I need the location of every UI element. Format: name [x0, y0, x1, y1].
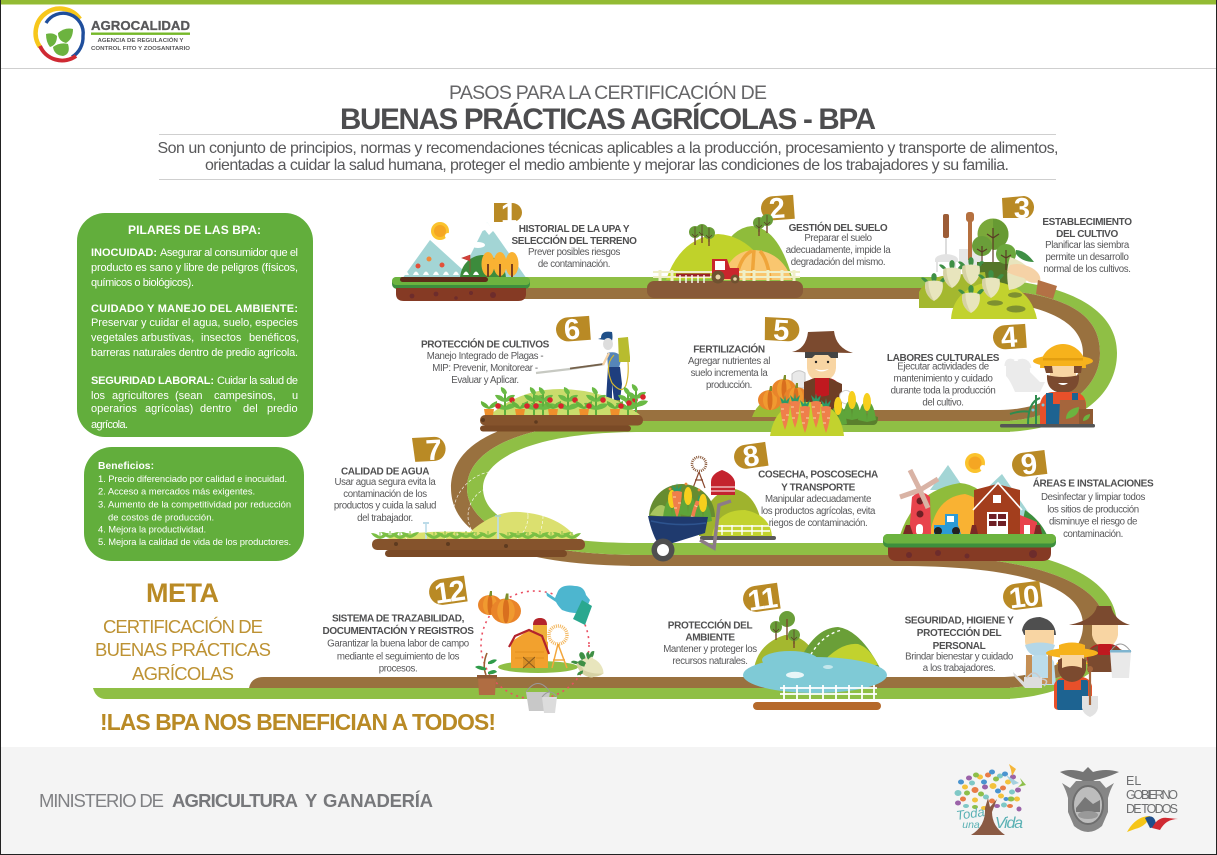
panel heading: PILARES DE LAS BPA:	[128, 223, 261, 237]
pillar: inocuidad: producto es sano y libre de peligros (físicos,	[91, 262, 298, 274]
pillar: inocuidad: INOCUIDAD:	[91, 247, 157, 259]
pillar: inocuidad: Asegurar al consumidor que el	[160, 247, 298, 259]
text 3: normal de los cultivos.	[1043, 264, 1131, 275]
ministry name: MINISTERIO DE	[39, 790, 164, 811]
badge 4	[992, 321, 1027, 355]
panel: beneficios	[84, 447, 304, 561]
logo: El Gobierno de Todos	[1126, 774, 1178, 832]
goal: meta: AGRÍCOLAS	[132, 663, 234, 684]
logo: Toda una Vida: Toda	[955, 804, 985, 823]
text 2: adecuadamente, impide la	[786, 245, 891, 256]
badge 6: 6	[563, 314, 581, 347]
badge 2	[760, 192, 795, 226]
ministry name: AGRICULTURA	[172, 790, 298, 811]
badge 11: 11	[746, 582, 780, 618]
text 4: Ejecutar actividades de	[897, 362, 989, 372]
dotted cycle with farm items	[475, 586, 609, 713]
pillar: cuidado y manejo del ambiente: vegetales	[91, 332, 139, 344]
intro paragraph: orientadas a cuidar la salud humana, proteger el medio ambiente y mejorar las condiciones de los trabajadores y su familia.	[205, 157, 1009, 174]
pillar: cuidado y manejo del ambiente: benéficos,	[249, 332, 299, 344]
text 6: Manejo Integrado de Plagas -	[427, 351, 543, 362]
panel: pilares de las BPA	[77, 213, 313, 437]
benefits list: 1. Precio diferenciado por calidad e inocuidad.	[98, 473, 287, 484]
text 2	[786, 221, 891, 268]
title	[340, 81, 876, 136]
logo: El Gobierno de Todos: EL	[1126, 774, 1141, 788]
text 10: Brindar bienestar y cuidado	[905, 652, 1013, 662]
badge 3	[1002, 193, 1034, 225]
pillar: inocuidad	[91, 247, 298, 289]
pillar: seguridad laboral: operarios	[91, 403, 137, 415]
pillar: cuidado y manejo del ambiente: barreras naturales dentro de predio agrícola.	[91, 347, 298, 359]
goal: meta	[95, 578, 271, 684]
pillar: seguridad laboral: campesinos,	[214, 390, 276, 402]
lake with trees and fence	[743, 611, 887, 710]
step 11: protección del ambiente	[663, 582, 887, 710]
ministry name: GANADERÍA	[323, 790, 433, 811]
pillar: seguridad laboral: u	[292, 390, 298, 402]
pillar: seguridad laboral: dentro	[200, 403, 231, 415]
slogan: !LAS BPA NOS BENEFICIAN A TODOS!	[100, 709, 496, 735]
text 3: DEL CULTIVO	[1056, 229, 1118, 240]
text 7: contaminación de los	[343, 489, 427, 500]
pillar: cuidado y manejo del ambiente: Preservar y cuidar el agua, suelo, especies	[91, 317, 298, 329]
logo: Agrocalidad: AGENCIA DE REGULACIÓN Y	[98, 36, 184, 44]
text 5: suelo incrementa la	[691, 368, 768, 379]
step 9: áreas e instalaciones	[883, 447, 1154, 561]
text 9: contaminación.	[1063, 529, 1123, 540]
badge 1	[494, 198, 522, 230]
pillar: cuidado y manejo del ambiente: insectos	[201, 332, 242, 344]
text 4: mantenimiento y cuidado	[894, 374, 992, 384]
text 12	[322, 614, 474, 674]
text 2: Preparar el suelo	[804, 233, 872, 244]
workers	[1013, 606, 1131, 717]
pillar: seguridad laboral: agricultores	[112, 390, 169, 402]
winding road	[93, 277, 1117, 699]
badge 7: 7	[425, 434, 443, 467]
step 6: protección de cultivos	[421, 313, 648, 432]
badge 9	[1010, 447, 1048, 483]
pillar: seguridad laboral: SEGURIDAD LABORAL:	[91, 375, 214, 387]
footer band	[0, 747, 1217, 855]
pillar: inocuidad: químicos o biológicos).	[91, 277, 194, 289]
text 4: del cultivo.	[922, 398, 964, 408]
landscape: mountains and orchard	[392, 222, 530, 301]
logo: El Gobierno de Todos: GOBIERNO	[1126, 788, 1178, 802]
intro paragraph: Son un conjunto de principios, normas y recomendaciones técnicas aplicables a la producción, procesamiento y transporte de alimentos,	[158, 140, 1059, 157]
ministry name: Y	[305, 790, 318, 811]
text 7: del trabajador.	[357, 513, 413, 524]
text 8: Manipular adecuadamente	[765, 494, 871, 505]
step 3: establecimiento del cultivo	[919, 193, 1132, 319]
text 1: SELECCIÓN DEL TERRENO	[511, 234, 637, 247]
goal: meta: META	[146, 578, 219, 608]
text 6: PROTECCIÓN DE CULTIVOS	[421, 338, 550, 350]
text 4: durante toda la producción	[891, 386, 995, 396]
pillar: seguridad laboral: los	[91, 390, 106, 402]
text 8	[758, 470, 878, 529]
text 9: los sitios de producción	[1047, 504, 1139, 516]
logo: Toda una Vida	[954, 764, 1026, 835]
text 2: GESTIÓN DEL SUELO	[789, 221, 888, 234]
text 9	[1033, 476, 1154, 540]
logo: Agrocalidad: AGROCALIDAD	[91, 18, 190, 33]
badge 8: 8	[741, 440, 761, 474]
step 7: calidad de agua	[334, 434, 585, 561]
text 5: producción.	[706, 380, 752, 391]
pillar: cuidado y manejo del ambiente: arbustivas,	[141, 332, 194, 344]
pillar: seguridad laboral: Cuidar la salud de	[217, 375, 298, 387]
benefits list: 5. Mejora la calidad de vida de los productores.	[98, 536, 291, 547]
badge 3: 3	[1014, 193, 1030, 225]
pillar: seguridad laboral	[91, 375, 298, 431]
step 5: fertilización	[688, 314, 878, 436]
text 5	[688, 342, 770, 391]
text 12: SISTEMA DE TRAZABILIDAD,	[332, 614, 465, 624]
text 1	[511, 224, 637, 270]
intro paragraph	[158, 134, 1059, 180]
text 7: productos y cuida la salud	[334, 500, 436, 512]
text 12: DOCUMENTACIÓN Y REGISTROS	[322, 624, 474, 637]
text 6: MIP: Prevenir, Monitorear -	[432, 363, 538, 374]
step 8: cosecha, poscosecha y transporte	[648, 439, 878, 562]
text 6	[421, 338, 550, 386]
farm buildings	[883, 453, 1056, 561]
logo: El Gobierno de Todos: DE TODOS	[1126, 802, 1178, 816]
pillar: seguridad laboral: (sean	[175, 390, 203, 402]
goal: meta: BUENAS PRÁCTICAS	[95, 639, 271, 660]
badge 6	[555, 313, 591, 347]
text 10	[905, 616, 1014, 674]
tools, trees and beets	[919, 212, 1057, 319]
pillar: cuidado y manejo del ambiente: CUIDADO Y MANEJO DEL AMBIENTE:	[91, 303, 298, 315]
pillar: seguridad laboral: agrícola.	[91, 419, 128, 431]
text 3: ESTABLECIMIENTO	[1042, 217, 1132, 228]
wheelbarrow, barn and windmill	[648, 457, 776, 562]
text 7	[334, 466, 436, 524]
text 11: AMBIENTE	[685, 632, 735, 644]
sprayer worker	[536, 332, 630, 411]
goal: meta: CERTIFICACIÓN DE	[103, 616, 263, 637]
text 7: CALIDAD DE AGUA	[341, 466, 429, 478]
benefits list: de costos de producción.	[108, 512, 214, 522]
text 7: Usar agua segura evita la	[335, 477, 436, 488]
text 10: a los trabajadores.	[923, 663, 995, 674]
badge 8	[732, 439, 769, 475]
pillar: seguridad laboral: predio	[267, 403, 298, 415]
text 5: FERTILIZACIÓN	[693, 342, 765, 356]
badge 1: 1	[501, 198, 517, 230]
benefits list: 4. Mejora la productividad.	[98, 524, 206, 534]
benefits heading: Beneficios:	[98, 461, 154, 472]
text 1: de contaminación.	[538, 259, 610, 270]
step 1: historial de la UPA	[392, 198, 637, 301]
text 9: Desinfectar y limpiar todos	[1041, 492, 1145, 503]
text 9: disminuye el riesgo de	[1049, 516, 1137, 528]
pillar: seguridad laboral: del	[243, 403, 258, 415]
ministry name	[39, 790, 433, 811]
benefits list: 3. Aumento de la competitividad por reducción	[98, 498, 291, 510]
text 3: permite un desarrollo	[1045, 252, 1129, 263]
text 11: PROTECCIÓN DEL	[668, 618, 752, 632]
logo: Agrocalidad: CONTROL FITO Y ZOOSANITARIO	[91, 46, 191, 52]
emblem: coat of arms	[1060, 767, 1119, 832]
logo: Toda una Vida: una	[962, 819, 980, 831]
badge 5: 5	[772, 314, 790, 347]
title: PASOS PARA LA CERTIFICACIÓN DE	[449, 81, 767, 104]
farmer with crops	[752, 331, 878, 436]
text 8: Y TRANSPORTE	[781, 482, 856, 494]
step 4: labores culturales	[887, 321, 1095, 428]
text 12: mediante el seguimiento de los	[337, 652, 460, 662]
text 1: HISTORIAL DE LA UPA Y	[519, 224, 630, 235]
badge 9: 9	[1019, 448, 1039, 482]
step 10: seguridad, higiene y protección	[905, 580, 1131, 717]
step 12: sistema de trazabilidad	[322, 575, 609, 713]
badge 5	[763, 314, 800, 348]
step 2: gestión del suelo	[647, 192, 891, 298]
text 10: SEGURIDAD, HIGIENE Y	[905, 616, 1014, 626]
benefits list: 2. Acceso a mercados más exigentes.	[98, 486, 255, 496]
irrigated field	[371, 471, 585, 561]
logo: Agrocalidad	[36, 9, 191, 60]
text 8: los productos agrícolas, evita	[761, 506, 876, 517]
text 3: Planificar las siembra	[1045, 240, 1130, 251]
text 10: PERSONAL	[933, 641, 986, 652]
text 4: LABORES CULTURALES	[887, 353, 1000, 364]
benefits list	[98, 473, 291, 547]
farmer with bags and plants	[1000, 344, 1095, 428]
text 3	[1042, 217, 1132, 275]
pillar: seguridad laboral: agrícolas)	[145, 403, 193, 415]
text 11: Mantener y proteger los	[663, 644, 757, 655]
badge 4: 4	[1000, 321, 1018, 355]
text 11: recursos naturales.	[672, 656, 748, 667]
badge 2: 2	[768, 192, 786, 226]
text 4	[887, 353, 1000, 408]
crops on soil	[480, 384, 648, 432]
text 6: Evaluar y Aplicar.	[451, 375, 519, 386]
text 11	[663, 618, 757, 667]
pillar: cuidado y manejo del ambiente	[91, 303, 299, 359]
hills, tractor and field	[647, 214, 803, 298]
badge 10: 10	[1007, 580, 1040, 615]
text 8: riegos de contaminación.	[769, 518, 867, 529]
text 9: ÁREAS E INSTALACIONES	[1033, 476, 1154, 490]
badge 7	[412, 434, 447, 468]
text 8: COSECHA, POSCOSECHA	[758, 470, 878, 480]
logo: Toda una Vida: Vida	[995, 815, 1023, 832]
text 12: procesos.	[379, 664, 417, 674]
badge 12: 12	[433, 575, 466, 611]
text 1: Prever posibles riesgos	[528, 247, 621, 258]
text 10: PROTECCIÓN DEL	[917, 626, 1001, 639]
text 5: Agregar nutrientes al	[688, 356, 770, 367]
text 2: degradación del mismo.	[791, 257, 885, 268]
title: BUENAS PRÁCTICAS AGRÍCOLAS - BPA	[340, 102, 876, 136]
text 12: Garantizar la buena labor de campo	[327, 638, 469, 650]
